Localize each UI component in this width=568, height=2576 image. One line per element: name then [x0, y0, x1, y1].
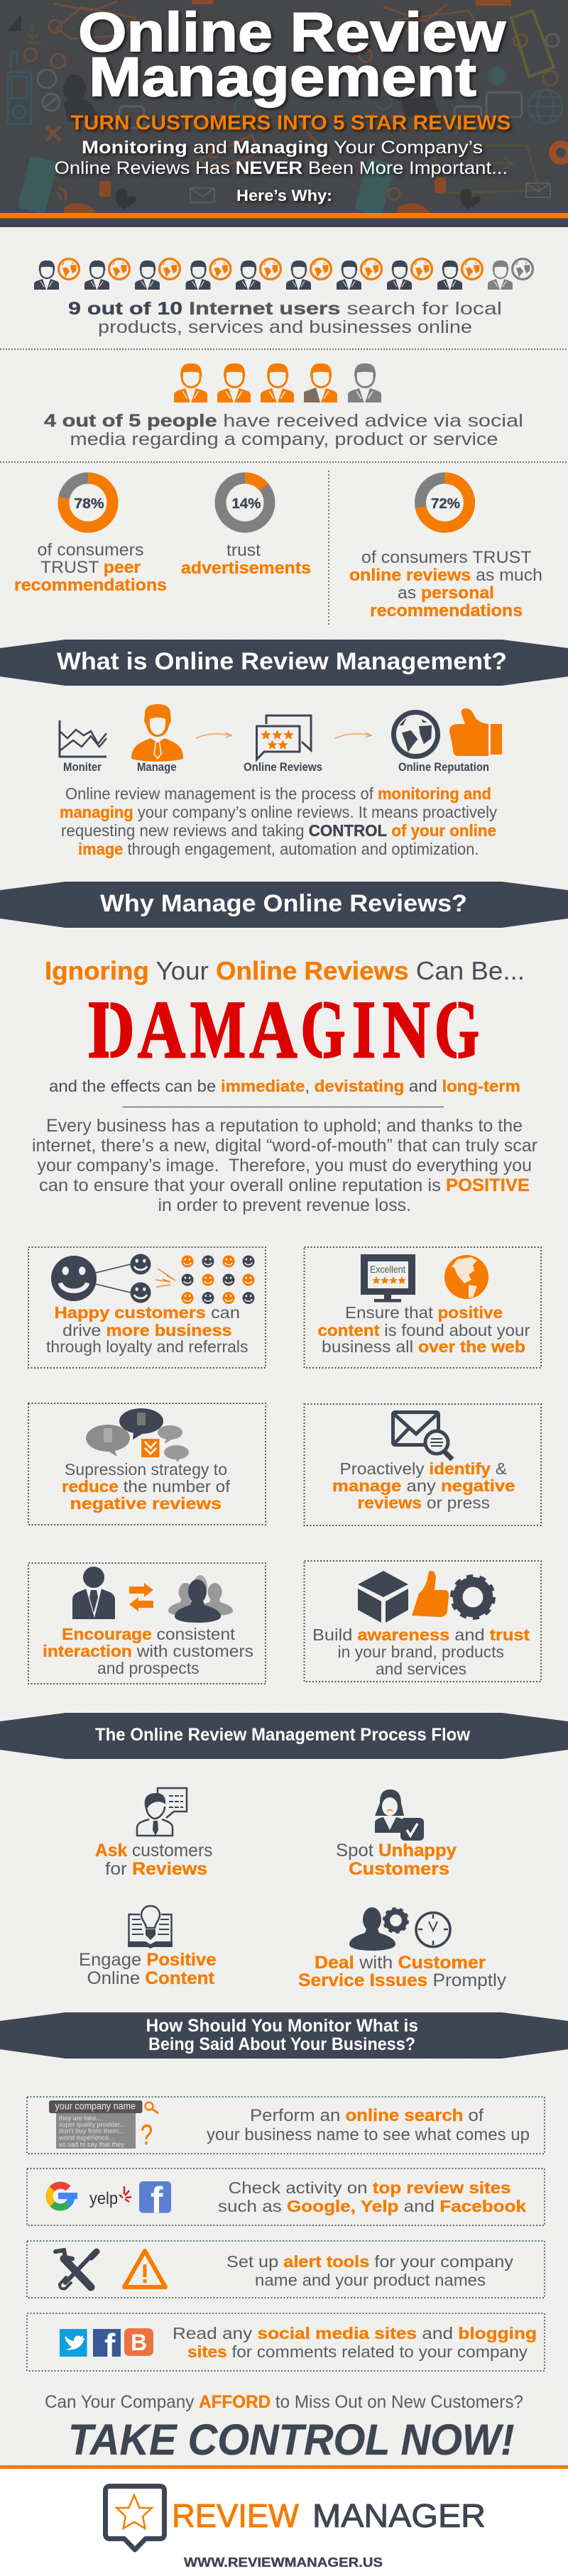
icon: facebook: f	[104, 2327, 116, 2364]
icon: monitor chart	[60, 720, 106, 757]
step: deal with issues	[298, 1907, 507, 1990]
heading: damaging: G	[435, 985, 479, 1075]
banner: how should you monitor	[0, 2012, 568, 2059]
icon: yelp	[89, 2186, 131, 2208]
icon: businessman	[72, 1567, 115, 1619]
chart: 72% donut: 72%	[431, 496, 460, 512]
box text: in your brand, products	[338, 1643, 504, 1661]
icon: smileys network	[51, 1254, 254, 1304]
step text: Service Issues Promptly	[298, 1971, 507, 1990]
box text	[43, 1625, 253, 1677]
icon: wrench and screwdriver	[55, 2250, 97, 2289]
panel: identify negative reviews	[304, 1404, 541, 1525]
box text: manage any negative	[332, 1476, 515, 1495]
box text	[46, 1303, 248, 1356]
banner: how should you monitor: Being Said About Your Business?	[148, 2034, 415, 2054]
trust peer text	[14, 541, 167, 595]
trust peer text: recommendations	[14, 576, 167, 595]
icon: monitor with rating	[361, 1254, 415, 1302]
icon: manage person	[131, 704, 183, 762]
box text: drive more business	[62, 1321, 231, 1339]
definition paragraph: Online review management is the process of monitoring and	[65, 784, 491, 803]
heading: damaging: A	[138, 985, 185, 1075]
icon: book with light bulb	[128, 1906, 173, 1949]
definition paragraph	[60, 784, 497, 858]
box text: Perform an online search of	[250, 2106, 484, 2125]
intro text	[54, 138, 508, 204]
stat: 4 out of 5	[44, 363, 523, 449]
box text: Build awareness and trust	[312, 1626, 530, 1644]
icon: facebook: f	[151, 2180, 163, 2221]
icon: blogger: B	[131, 2330, 147, 2355]
step text	[336, 1841, 457, 1879]
chart: 14% donut: 14%	[231, 496, 261, 512]
stat text: media regarding a company, product or service	[70, 429, 498, 449]
banner: why manage online reviews	[0, 882, 568, 928]
trust peer text: of consumers	[37, 541, 143, 559]
chart: 72% donut	[420, 478, 469, 527]
panel: suppression strategy	[28, 1403, 266, 1525]
heading: damaging: A	[250, 985, 297, 1075]
chart: 14% donut	[220, 478, 270, 527]
banner: what is online review management: What is Online Review Management?	[57, 648, 507, 675]
logo wordmark: REVIEW	[172, 2497, 300, 2534]
online reviews trust text: as personal	[398, 583, 494, 603]
box text	[207, 2106, 530, 2144]
chart: 78% donut	[64, 478, 112, 527]
online reviews trust text: of consumers TRUST	[361, 548, 532, 567]
box text	[62, 1460, 231, 1513]
icon: person with speech bubble	[137, 1788, 187, 1836]
title: Online Review	[78, 1, 506, 63]
closing question: Can Your Company AFFORD to Miss Out on New Customers?	[45, 2392, 523, 2412]
box text: your business name to see what comes up	[207, 2125, 530, 2144]
stat text: 4 out of 5 people have received advice via social	[44, 411, 523, 431]
online reviews trust text: online reviews as much	[349, 566, 542, 585]
stat text: 9 out of 10 Internet users search for local	[68, 299, 502, 319]
stat text	[44, 411, 523, 449]
icon: orange globe	[444, 1255, 488, 1299]
box text: Proactively identify &	[339, 1459, 507, 1478]
online reviews trust text	[349, 548, 542, 620]
intro text: Here’s Why:	[236, 187, 332, 204]
banner: what is online review management	[0, 640, 568, 686]
label: online reviews: Online Reviews	[244, 760, 322, 774]
arrow	[196, 733, 231, 738]
stat text	[68, 299, 502, 337]
box text	[173, 2324, 537, 2361]
definition paragraph: image through engagement, automation and optimization.	[78, 840, 479, 858]
icon: twitter	[60, 2329, 87, 2357]
reputation paragraph: in order to prevent revenue loss.	[158, 1195, 411, 1215]
definition paragraph: requesting new reviews and taking CONTROL of your online	[61, 821, 496, 840]
arrow	[335, 733, 371, 738]
panel: positive content	[304, 1247, 541, 1368]
icon: search results: ?	[141, 2120, 153, 2151]
website url: WWW.REVIEWMANAGER.US	[184, 2555, 383, 2570]
panel: social media	[27, 2313, 545, 2371]
logo wordmark	[172, 2497, 486, 2534]
icon: unhappy woman with checkbox	[375, 1790, 424, 1841]
box text: and services	[376, 1660, 466, 1678]
icon: search results	[49, 2100, 158, 2151]
intro text: Online Reviews Has NEVER Been More Important...	[54, 158, 508, 178]
heading: damaging: N	[383, 985, 430, 1075]
label: moniter: Moniter	[63, 760, 102, 774]
icon: facebook	[139, 2180, 171, 2221]
trust advertisements text: advertisements	[181, 559, 311, 578]
icon: facebook	[93, 2327, 121, 2364]
box text: interaction with customers	[43, 1642, 253, 1660]
stat: 9 out of 10	[34, 259, 532, 337]
definition paragraph: managing your company’s online reviews. It means proactively	[60, 803, 497, 821]
icon: customer group	[168, 1575, 233, 1623]
icon: thumbs up	[412, 1571, 449, 1617]
box text: Supression strategy to	[65, 1460, 227, 1479]
intro text: Monitoring and Managing Your Company’s	[82, 138, 483, 158]
panel: process icons	[60, 704, 502, 774]
icon: google	[50, 2185, 75, 2208]
step text	[79, 1950, 217, 1988]
trust advertisements text: trust	[226, 541, 261, 560]
step text: Online Content	[87, 1968, 215, 1988]
heading: ignoring reviews: Ignoring Your Online Reviews Can Be...	[45, 956, 525, 985]
box text: Happy customers can	[54, 1303, 240, 1322]
box text	[218, 2178, 526, 2215]
icon: online reviews bubbles	[257, 716, 311, 760]
box text: negative reviews	[70, 1494, 222, 1513]
header stripes	[0, 213, 568, 227]
footer	[0, 2465, 568, 2576]
header panel	[0, 0, 568, 217]
stat text: products, services and businesses online	[98, 317, 472, 337]
step text: Engage Positive	[79, 1950, 217, 1970]
heading: damaging: G	[301, 985, 345, 1075]
subtitle: TURN CUSTOMERS INTO 5 STAR REVIEWS	[71, 112, 511, 135]
icon: search results: your company name	[55, 2101, 136, 2111]
reputation paragraph: your company’s image. Therefore, you must do everything you	[37, 1156, 532, 1175]
box text	[318, 1303, 530, 1356]
step text	[298, 1953, 507, 1990]
step: engage positive content	[79, 1906, 217, 1988]
icon row: five people	[174, 363, 381, 402]
box text: through loyalty and referrals	[46, 1337, 248, 1356]
icon: yelp: yelp	[89, 2189, 118, 2208]
box text: such as Google, Yelp and Facebook	[218, 2197, 526, 2215]
banner: process flow: The Online Review Management Process Flow	[95, 1725, 471, 1745]
label: online reputation: Online Reputation	[398, 760, 489, 774]
icon: person, gear and clock	[349, 1907, 450, 1951]
box text: and prospects	[97, 1659, 199, 1677]
icon: cube	[358, 1571, 408, 1623]
box text: reduce the number of	[62, 1477, 231, 1496]
heading: damaging: D	[88, 985, 135, 1075]
icon: exchange arrows	[129, 1583, 153, 1611]
step: ask customers	[95, 1788, 213, 1879]
icon: search results: worst experience...	[58, 2134, 114, 2142]
panel: encourage interaction	[28, 1563, 266, 1684]
box text: Encourage consistent	[62, 1625, 236, 1643]
label: manage: Manage	[137, 760, 176, 774]
step text	[95, 1841, 213, 1879]
call to action: TAKE CONTROL NOW!	[68, 2416, 514, 2464]
icon: blogger	[124, 2328, 153, 2356]
step text: Spot Unhappy	[336, 1841, 457, 1860]
box text	[312, 1626, 530, 1678]
box text: content is found about your	[318, 1321, 530, 1339]
logo icon	[105, 2486, 165, 2550]
icon: thumbs down bubbles	[86, 1408, 189, 1462]
box text: sites for comments related to your company	[187, 2342, 528, 2361]
reputation paragraph: Every business has a reputation to uphold; and thanks to the	[46, 1116, 523, 1136]
reputation paragraph: can to ensure that your overall online reputation is POSITIVE	[39, 1175, 530, 1195]
box text: Check activity on top review sites	[229, 2178, 511, 2197]
heading: damaging: I	[352, 985, 376, 1075]
step text: Customers	[349, 1859, 449, 1879]
step: spot unhappy customers	[336, 1790, 457, 1879]
box text: Read any social media sites and blogging	[173, 2324, 537, 2342]
banner: process flow	[0, 1713, 568, 1759]
panel: alert tools	[27, 2241, 545, 2298]
banner: why manage online reviews: Why Manage Online Reviews?	[100, 890, 467, 917]
box text	[332, 1459, 515, 1512]
icon: envelope with magnifier	[393, 1413, 452, 1459]
panel: consumer trust donuts	[14, 471, 542, 627]
icon: search results: so sad to say that they	[59, 2141, 124, 2149]
icon: thumbs up	[449, 708, 502, 756]
title: Management	[89, 45, 476, 108]
icon: search results: they are fake...	[59, 2115, 102, 2122]
heading: damaging: M	[190, 985, 246, 1075]
icon row: people with globes	[34, 259, 532, 290]
banner: how should you monitor: How Should You Monitor What is	[146, 2016, 418, 2036]
trust peer text: TRUST peer	[40, 558, 141, 577]
step text: for Reviews	[105, 1859, 207, 1879]
panel: review sites	[27, 2169, 545, 2225]
heading: damaging	[88, 985, 479, 1075]
panel: build awareness	[304, 1561, 541, 1682]
trust advertisements text	[181, 541, 311, 578]
effects line: and the effects can be immediate, devistating and long-term	[49, 1077, 520, 1095]
box text: reviews or press	[358, 1493, 490, 1512]
box text: Set up alert tools for your company	[226, 2252, 514, 2271]
panel: online search	[27, 2097, 545, 2154]
reputation paragraph: internet, there’s a new, digital “word-of-mouth” that can truly scar	[32, 1136, 537, 1156]
box text	[226, 2252, 514, 2289]
icon: search results: super quality provider...	[59, 2121, 125, 2129]
icon: warning triangle	[124, 2251, 165, 2287]
icon: globe	[393, 712, 438, 757]
step text: Deal with Customer	[315, 1953, 486, 1973]
box text: name and your product names	[255, 2271, 486, 2289]
panel: happy customers	[28, 1247, 266, 1368]
box text: Ensure that positive	[345, 1303, 503, 1322]
title	[78, 1, 506, 108]
step text: Ask customers	[95, 1841, 213, 1860]
chart: 78% donut: 78%	[74, 496, 104, 512]
icon: search results: don't buy from them...	[59, 2127, 124, 2135]
icon: gear	[452, 1577, 493, 1618]
reputation paragraph	[32, 1116, 537, 1215]
icon: monitor with rating: Excellent	[370, 1264, 405, 1275]
logo wordmark: MANAGER	[312, 2497, 486, 2534]
online reviews trust text: recommendations	[370, 601, 523, 620]
box text: business all over the web	[322, 1337, 525, 1356]
